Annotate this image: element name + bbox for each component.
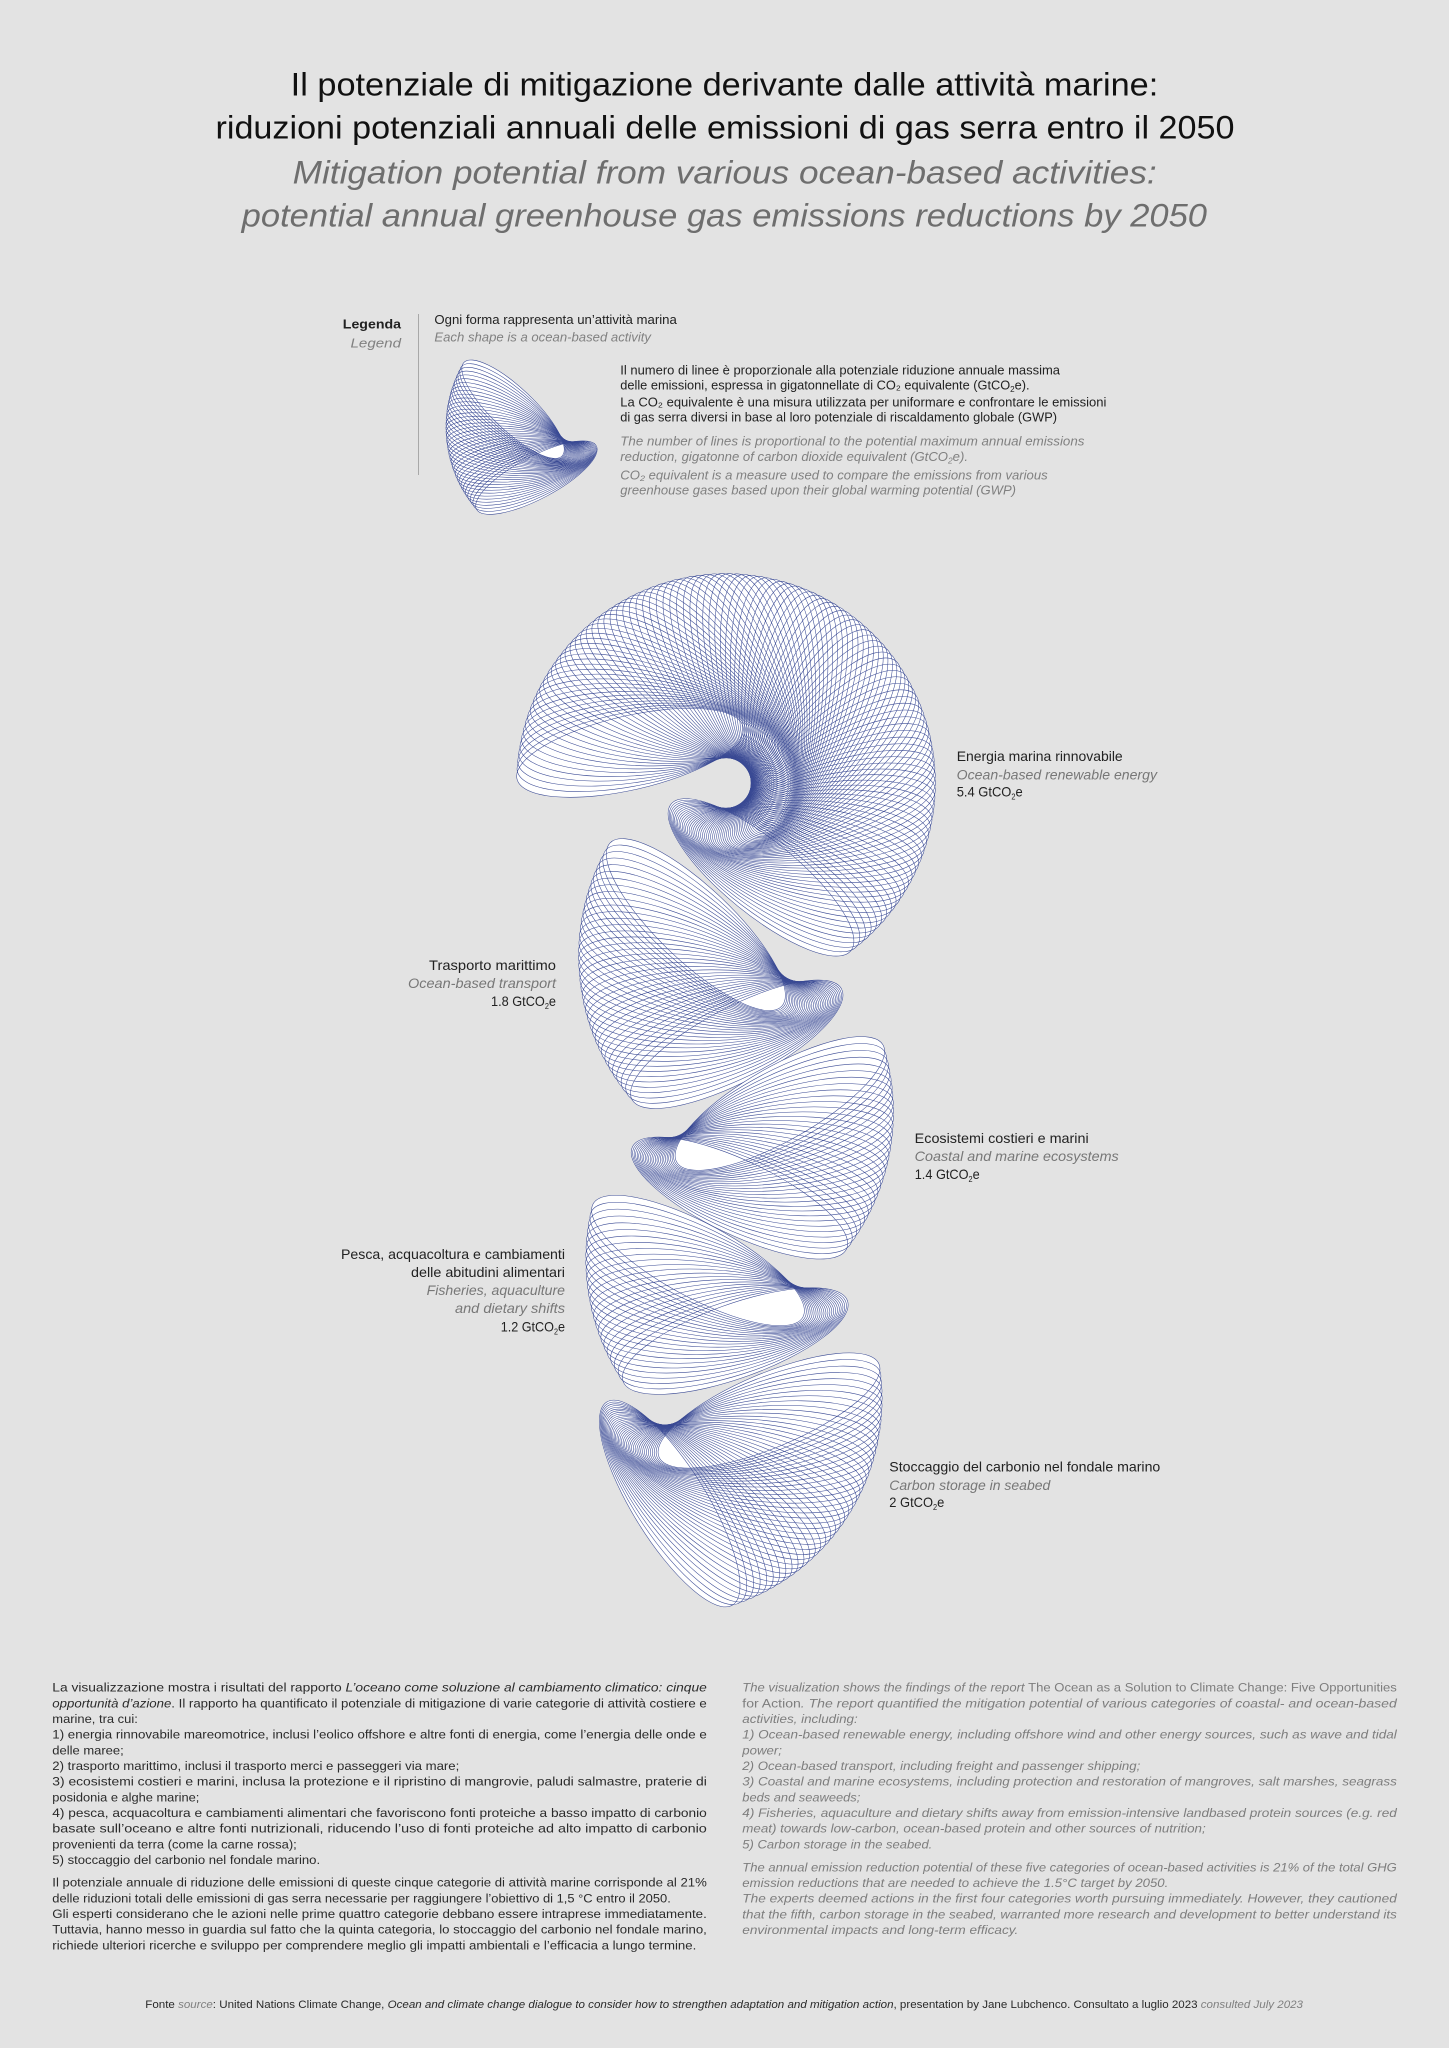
label: fisheries: e: [558, 1319, 565, 1335]
text block: English description: 2) Ocean-based transport, including freight and passenger shipping;: [741, 1759, 1141, 1773]
text block: English description: The annual emission reduction potential of these five categories of ocean-based activities is 21% of the total GHG: [742, 1860, 1397, 1874]
title: riduzioni potenziali annuali delle emissioni di gas serra entro il 2050: [216, 109, 1234, 145]
legend explanation text: Il numero di linee è proporzionale alla potenziale riduzione annuale massima: [620, 364, 1060, 378]
text block: English description: for Action . The report quantified the mitigation potential of various categories of coastal- and ocean-based: [742, 1696, 1398, 1710]
legend explanation text: greenhouse gases based upon their global warming potential (GWP): [620, 483, 1016, 497]
text block: Italian description: richiede ulteriori ricerche e sviluppo per comprendere meglio gli impatti ambientali e l’efficacia a lungo termine.: [52, 1938, 696, 1952]
label: fisheries: Pesca, acquacoltura e cambiamenti: [341, 1246, 565, 1262]
label: transport: 1.8 GtCO: [491, 993, 550, 1009]
text block: Italian description: 2) trasporto marittimo, inclusi il trasporto merci e passeggeri via mare;: [52, 1759, 459, 1773]
legend explanation text: 2: [1010, 385, 1015, 394]
shape: ocean-based renewable energy: [501, 467, 1092, 1138]
icon: legend sample shape: [395, 337, 665, 607]
label: ecosystems: [915, 1130, 1119, 1184]
label: renewable energy: Ocean-based renewable energy: [957, 766, 1158, 782]
text block: English description: 4) Fisheries, aquaculture and dietary shifts away from emission-intensive landbased protein sources (e.g. red: [742, 1806, 1398, 1820]
text block: Italian description: 3) ecosistemi costieri e marini, inclusa la protezione e il ripristino di mangrovie, paludi salmastre, praterie di: [52, 1775, 707, 1789]
legend explanation text: 2: [947, 457, 953, 466]
shape: ocean-based transport: [489, 799, 961, 1270]
text block: Italian description: delle riduzioni totali delle emissioni di gas serra necessarie per raggiungere l’obiettivo di 1,5 °C entro il 2050.: [52, 1891, 671, 1905]
label: renewable energy: 5.4 GtCO: [957, 784, 1016, 800]
source line: Fonte source: United Nations Climate Change, Ocean and climate change dialogue to consider how to strengthen adaptation and mitigation action , presentation by Jane Lubchenco. Consultato a luglio 2023 consulted July 2023: [145, 1999, 1304, 2011]
label: fisheries: 2: [554, 1328, 558, 1337]
legend explanation text: [620, 364, 1106, 497]
text block: Italian description: 4) pesca, acquacoltura e cambiamenti alimentari che favoriscono fonti proteiche a basso impatto di carbonio: [52, 1806, 707, 1820]
legend explanation text: La CO₂ equivalente è una misura utilizzata per uniformare e confrontare le emissioni: [620, 395, 1106, 409]
text block: English description: 3) Coastal and marine ecosystems, including protection and restoration of mangroves, salt marshes, seagrass: [742, 1775, 1397, 1789]
text block: Italian description: 1) energia rinnovabile mareomotrice, inclusi l’eolico offshore e altre fonti di energia, come l’energia delle onde e: [52, 1728, 707, 1742]
text block: Italian description: opportunità d’azione . Il rapporto ha quantificato il potenziale di mitigazione di varie categorie di attività costiere e: [52, 1696, 707, 1710]
text block: English description: 5) Carbon storage in the seabed.: [742, 1837, 932, 1851]
text block: English description: power;: [741, 1743, 782, 1757]
text block: Italian description: Tuttavia, hanno messo in guardia sul fatto che la quinta categoria, lo stoccaggio del carbonio nel fondale marino,: [52, 1923, 707, 1937]
text block: Italian description: [52, 1681, 707, 1952]
text block: English description: meat) towards low-carbon, ocean-based protein and other sources of nutrition;: [742, 1822, 1206, 1836]
label: ecosystems: e: [973, 1166, 980, 1182]
label: fisheries: Fisheries, aquaculture: [427, 1282, 565, 1298]
text block: Italian description: delle maree;: [52, 1743, 124, 1757]
text block: English description: that the fifth, carbon storage in the seabed, warranted more research and development to better understand its: [742, 1907, 1397, 1921]
text block: Italian description: La visualizzazione mostra i risultati del rapporto L’oceano come soluzione al cambiamento climatico: cinque: [52, 1681, 707, 1695]
label: fisheries: 1.2 GtCO: [501, 1319, 560, 1335]
text block: Italian description: provenienti da terra (come la carne rossa);: [52, 1837, 297, 1851]
legend explanation text: reduction, gigatonne of carbon dioxide equivalent (GtCO: [620, 450, 935, 464]
legend heading: Legend: [350, 336, 402, 350]
title: [216, 67, 1234, 234]
text block: Italian description: basate sull’oceano e altre fonti nutrizionali, riducendo l’uso di fonti proteiche ad alto impatto di carbonio: [52, 1822, 707, 1836]
label: renewable energy: [957, 748, 1158, 802]
label: carbon storage: Carbon storage in seabed: [889, 1477, 1052, 1493]
label: transport: e: [549, 993, 556, 1009]
text block: English description: environmental impacts and long-term efficacy.: [742, 1923, 1018, 1937]
label: renewable energy: e: [1015, 784, 1023, 800]
label: carbon storage: 2: [933, 1503, 938, 1512]
label: carbon storage: e: [937, 1494, 944, 1510]
text block: English description: beds and seaweeds;: [742, 1790, 861, 1804]
label: fisheries: and dietary shifts: [455, 1300, 565, 1316]
shape: coastal and marine ecosystems: [564, 1004, 941, 1367]
text block: English description: emission reductions that are needed to achieve the 1.5°C target by 2050.: [742, 1876, 1168, 1890]
title: Mitigation potential from various ocean-based activities:: [293, 154, 1157, 190]
text block: Italian description: posidonia e alghe marine;: [52, 1790, 199, 1804]
text block: English description: 1) Ocean-based renewable energy, including offshore wind and other energy sources, such as wave and tidal: [742, 1728, 1398, 1742]
label: ecosystems: Coastal and marine ecosystems: [915, 1148, 1119, 1164]
legend heading: Legenda: [343, 317, 402, 331]
label: transport: 2: [545, 1002, 549, 1011]
label: carbon storage: Stoccaggio del carbonio nel fondale marino: [889, 1459, 1161, 1475]
legend explanation text: delle emissioni, espressa in gigatonnellate di CO₂ equivalente (GtCO: [620, 378, 1005, 392]
legend explanation text: e).: [1015, 378, 1030, 392]
legend heading: [343, 317, 402, 350]
label: transport: Trasporto marittimo: [429, 957, 556, 973]
text block: English description: The experts deemed actions in the first four categories worth pursuing immediately. However, they cautioned: [742, 1892, 1398, 1906]
label: ecosystems: 2: [969, 1175, 973, 1184]
legend explanation text: The number of lines is proportional to the potential maximum annual emissions: [620, 434, 1085, 448]
text block: English description: The visualization shows the findings of the report The Ocean as a Solution to Climate Change: Five Opportunities: [742, 1681, 1397, 1695]
label: transport: [408, 957, 557, 1011]
label: carbon storage: 2 GtCO: [889, 1494, 937, 1510]
shape: carbon storage in seabed: [474, 1279, 925, 1717]
legend intro text: Ogni forma rappresenta un’attività marina: [434, 313, 677, 327]
label: renewable energy: 2: [1011, 793, 1016, 802]
text block: English description: activities, including:: [742, 1712, 858, 1726]
shape: fisheries, aquaculture and dietary shifts: [541, 1160, 923, 1522]
label: carbon storage: [889, 1459, 1161, 1512]
legend explanation text: CO₂ equivalent is a measure used to compare the emissions from various: [620, 469, 1048, 483]
text block: Italian description: marine, tra cui:: [52, 1712, 138, 1726]
title: Il potenziale di mitigazione derivante dalle attività marine:: [291, 67, 1158, 103]
text block: Italian description: Il potenziale annuale di riduzione delle emissioni di queste cinque categorie di attività marine corrisponde al 21%: [52, 1876, 707, 1890]
panel: legend: [343, 313, 1106, 607]
legend explanation text: di gas serra diversi in base al loro potenziale di riscaldamento globale (GWP): [620, 410, 1057, 424]
text block: Italian description: 5) stoccaggio del carbonio nel fondale marino.: [52, 1853, 320, 1867]
legend explanation text: e).: [953, 450, 968, 464]
label: fisheries: [341, 1246, 565, 1337]
text block: Italian description: Gli esperti considerano che le azioni nelle prime quattro categorie debbano essere intraprese immediatamente.: [52, 1907, 707, 1921]
label: ecosystems: 1.4 GtCO: [915, 1166, 974, 1182]
legend intro text: [434, 313, 677, 345]
label: fisheries: delle abitudini alimentari: [411, 1264, 565, 1280]
legend intro text: Each shape is a ocean-based activity: [434, 331, 652, 345]
label: ecosystems: Ecosistemi costieri e marini: [915, 1130, 1089, 1146]
text block: English description: [741, 1681, 1398, 1937]
legend divider: [418, 314, 419, 475]
label: transport: Ocean-based transport: [408, 975, 557, 991]
label: renewable energy: Energia marina rinnovabile: [957, 748, 1123, 764]
title: potential annual greenhouse gas emissions reductions by 2050: [241, 198, 1207, 234]
